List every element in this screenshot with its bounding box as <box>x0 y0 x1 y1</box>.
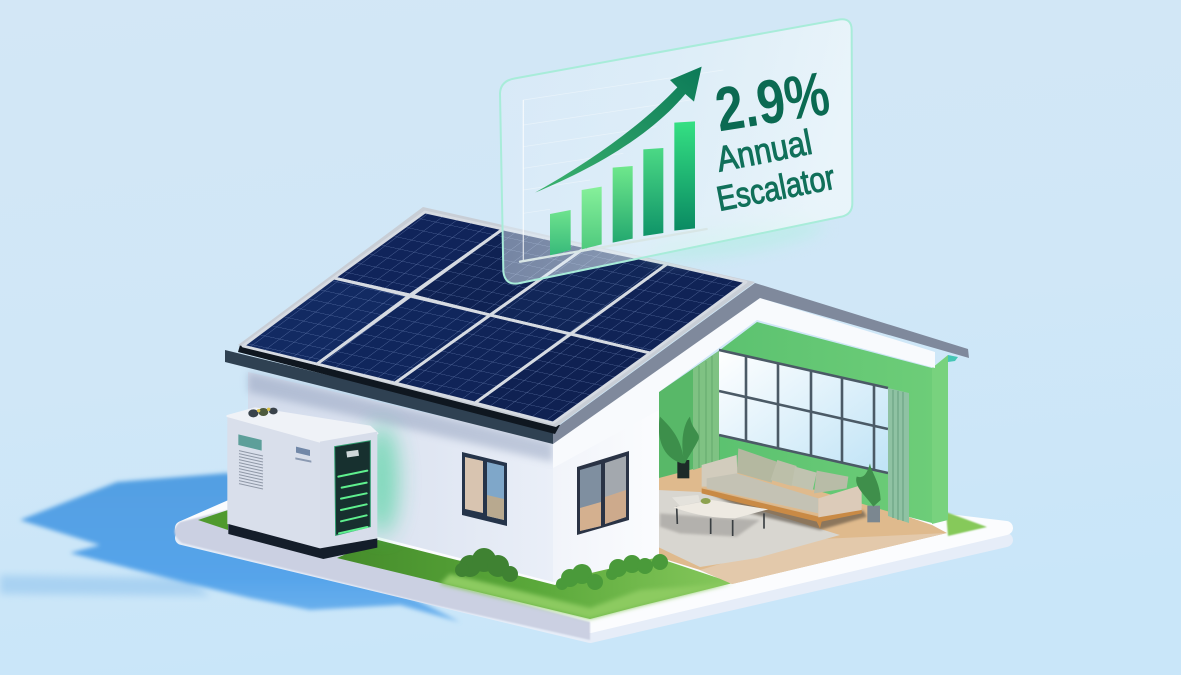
label: Escalator: Escalator <box>714 159 838 219</box>
right curtain <box>888 388 909 523</box>
pale shadow band <box>0 575 210 596</box>
lawn highlight <box>440 574 733 619</box>
panel cells <box>243 212 746 423</box>
roof eave left <box>225 350 553 444</box>
left plant <box>659 417 699 478</box>
sofa <box>702 448 862 528</box>
panel body <box>500 19 852 284</box>
glass panel reflection <box>644 212 826 268</box>
bar 4 <box>643 148 663 236</box>
wall face <box>720 322 932 523</box>
vent lines <box>239 451 263 489</box>
wooden floor <box>658 462 947 584</box>
LED bars <box>338 471 367 533</box>
bush left <box>455 548 518 582</box>
roof solar array <box>238 207 755 427</box>
home battery unit <box>227 408 377 559</box>
gable band <box>553 298 935 468</box>
battery left face <box>227 416 320 548</box>
brand label <box>296 447 310 456</box>
green back wall <box>659 322 948 524</box>
sofa seat <box>707 473 818 513</box>
bar 5 <box>674 121 695 231</box>
sofa shadow <box>703 490 867 530</box>
front grass lawn <box>337 540 733 619</box>
green pillar <box>932 355 948 524</box>
floor sheen <box>700 533 947 584</box>
house side wall <box>248 372 553 582</box>
glass chart panel <box>500 19 852 284</box>
chart baseline <box>520 229 707 262</box>
battery display panel <box>335 441 370 535</box>
platform side edge <box>182 462 1006 636</box>
teal trim <box>948 355 958 362</box>
side window <box>462 452 507 526</box>
battery base band <box>228 524 377 559</box>
cast shadow of the house <box>20 473 460 622</box>
cell grid <box>245 213 746 422</box>
window frame <box>719 350 888 473</box>
sofa right arm <box>818 485 862 517</box>
house front wall <box>553 380 659 582</box>
roof edge right <box>553 283 969 444</box>
sticker <box>238 434 262 451</box>
interior floor <box>658 462 947 584</box>
table shadow <box>660 513 760 537</box>
coffee table <box>672 495 768 536</box>
frame <box>238 207 755 427</box>
bar 3 <box>613 166 633 243</box>
value: 2.9%: 2.9% <box>711 59 834 145</box>
right plant <box>856 463 881 522</box>
y axis <box>521 100 525 261</box>
under eave shadow <box>248 372 553 462</box>
front shrubs <box>556 554 668 590</box>
sofa base wood <box>702 488 862 528</box>
label: Annual: Annual <box>713 123 815 180</box>
battery top face <box>227 408 377 442</box>
front window <box>577 451 629 535</box>
bar 2 <box>582 187 602 249</box>
platform left grey rim <box>174 510 590 640</box>
right grass <box>946 512 987 536</box>
terminals <box>248 408 278 417</box>
platform base <box>174 450 1006 640</box>
sofa back cushions <box>737 448 777 483</box>
large window <box>719 350 888 473</box>
glass <box>719 350 888 473</box>
sofa left arm <box>702 455 737 487</box>
battery right face <box>320 432 377 548</box>
bar 1 <box>550 210 571 256</box>
growth arrow <box>535 67 702 193</box>
left curtain <box>693 351 719 470</box>
back left grass <box>198 510 228 530</box>
grey rug <box>658 490 840 567</box>
roof underside dark line <box>238 345 560 434</box>
platform top surface <box>182 450 1006 626</box>
battery glow on wall <box>366 425 398 535</box>
left green wall <box>659 350 720 478</box>
chart grid <box>523 70 723 213</box>
sofa and furniture <box>659 417 881 537</box>
panel dividers <box>317 229 667 403</box>
status indicator <box>346 450 359 457</box>
